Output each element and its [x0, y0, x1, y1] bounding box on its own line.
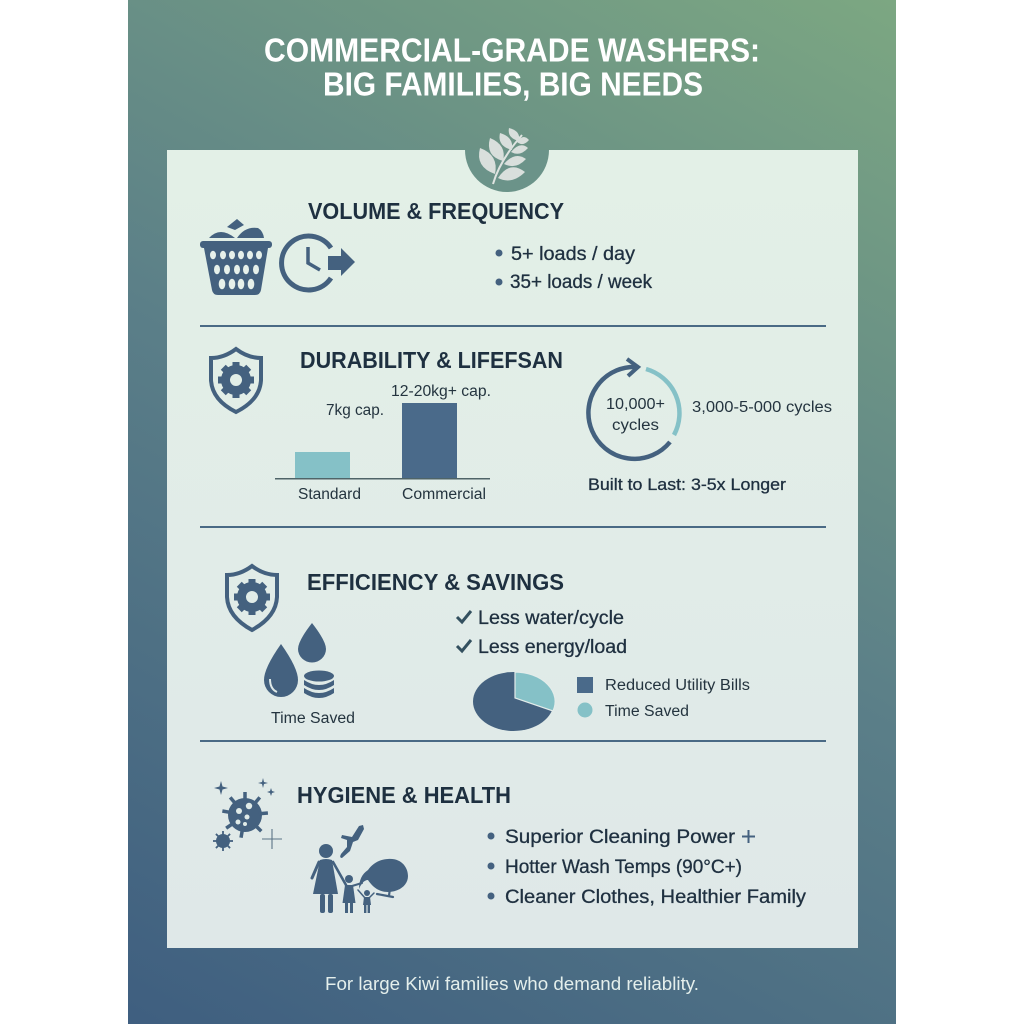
bar chart: capacity: Commercial — [402, 486, 486, 503]
section: volume and frequency — [200, 198, 652, 295]
icon: family and kiwi bird — [312, 825, 408, 913]
bullet list: loads: 35+ loads / week — [510, 272, 652, 293]
footer tagline: For large Kiwi families who demand reliablity. — [325, 974, 699, 994]
heading: durability: DURABILITY & LIFEFSAN — [300, 347, 563, 373]
check list: savings — [457, 608, 627, 658]
bar chart: capacity — [275, 383, 491, 503]
check list: savings: Less energy/load — [478, 637, 627, 658]
legend: pie chart: Time Saved — [605, 703, 689, 720]
bar chart: capacity: 7kg cap. — [326, 402, 384, 419]
background poster — [128, 0, 896, 1024]
icon: shield with gear — [227, 566, 277, 630]
bar chart: capacity: 12-20kg+ cap. — [391, 383, 491, 400]
heading: efficiency: EFFICIENCY & SAVINGS — [307, 569, 564, 595]
bullet list: hygiene: Cleaner Clothes, Healthier Family — [505, 887, 807, 908]
caption: built to last: Built to Last: 3-5x Longer — [588, 475, 786, 494]
heading: volume and frequency: VOLUME & FREQUENCY — [308, 198, 564, 224]
icon: laundry basket — [200, 219, 272, 295]
ring chart: cycles: 3,000-5-000 cycles — [692, 399, 832, 416]
bullet list: hygiene: Superior Cleaning Power — [505, 827, 736, 848]
icon: water drops and coins — [264, 623, 334, 698]
icon: fern medallion — [465, 128, 549, 192]
section: durability and lifespan — [211, 347, 832, 503]
icon: clock with arrow — [282, 236, 355, 290]
bullet list: loads — [496, 244, 652, 293]
ring chart: cycles: cycles — [612, 417, 659, 434]
bullet list: loads: 5+ loads / day — [511, 244, 636, 265]
title — [264, 32, 760, 102]
ring chart: cycles — [588, 359, 832, 459]
check list: savings: Less water/cycle — [478, 608, 624, 629]
heading: hygiene: HYGIENE & HEALTH — [297, 782, 511, 808]
title: BIG FAMILIES, BIG NEEDS — [323, 66, 703, 102]
caption: time saved: Time Saved — [271, 710, 355, 727]
bar chart: capacity: Standard — [298, 486, 361, 503]
icon: shield with gear — [211, 349, 261, 412]
bullet list: hygiene: Hotter Wash Temps (90°C+) — [505, 857, 742, 878]
section: hygiene and health — [213, 778, 807, 913]
legend: pie chart: Reduced Utility Bills — [605, 677, 750, 694]
section: efficiency and savings — [227, 566, 750, 731]
legend: pie chart — [577, 677, 750, 720]
panel: main content — [167, 150, 858, 948]
ring chart: cycles: 10,000+ — [606, 396, 665, 413]
icon: germs and sparkles — [213, 778, 282, 851]
pie chart: savings — [473, 672, 555, 731]
title: COMMERCIAL-GRADE WASHERS: — [264, 32, 760, 68]
bullet list: hygiene — [488, 827, 807, 908]
